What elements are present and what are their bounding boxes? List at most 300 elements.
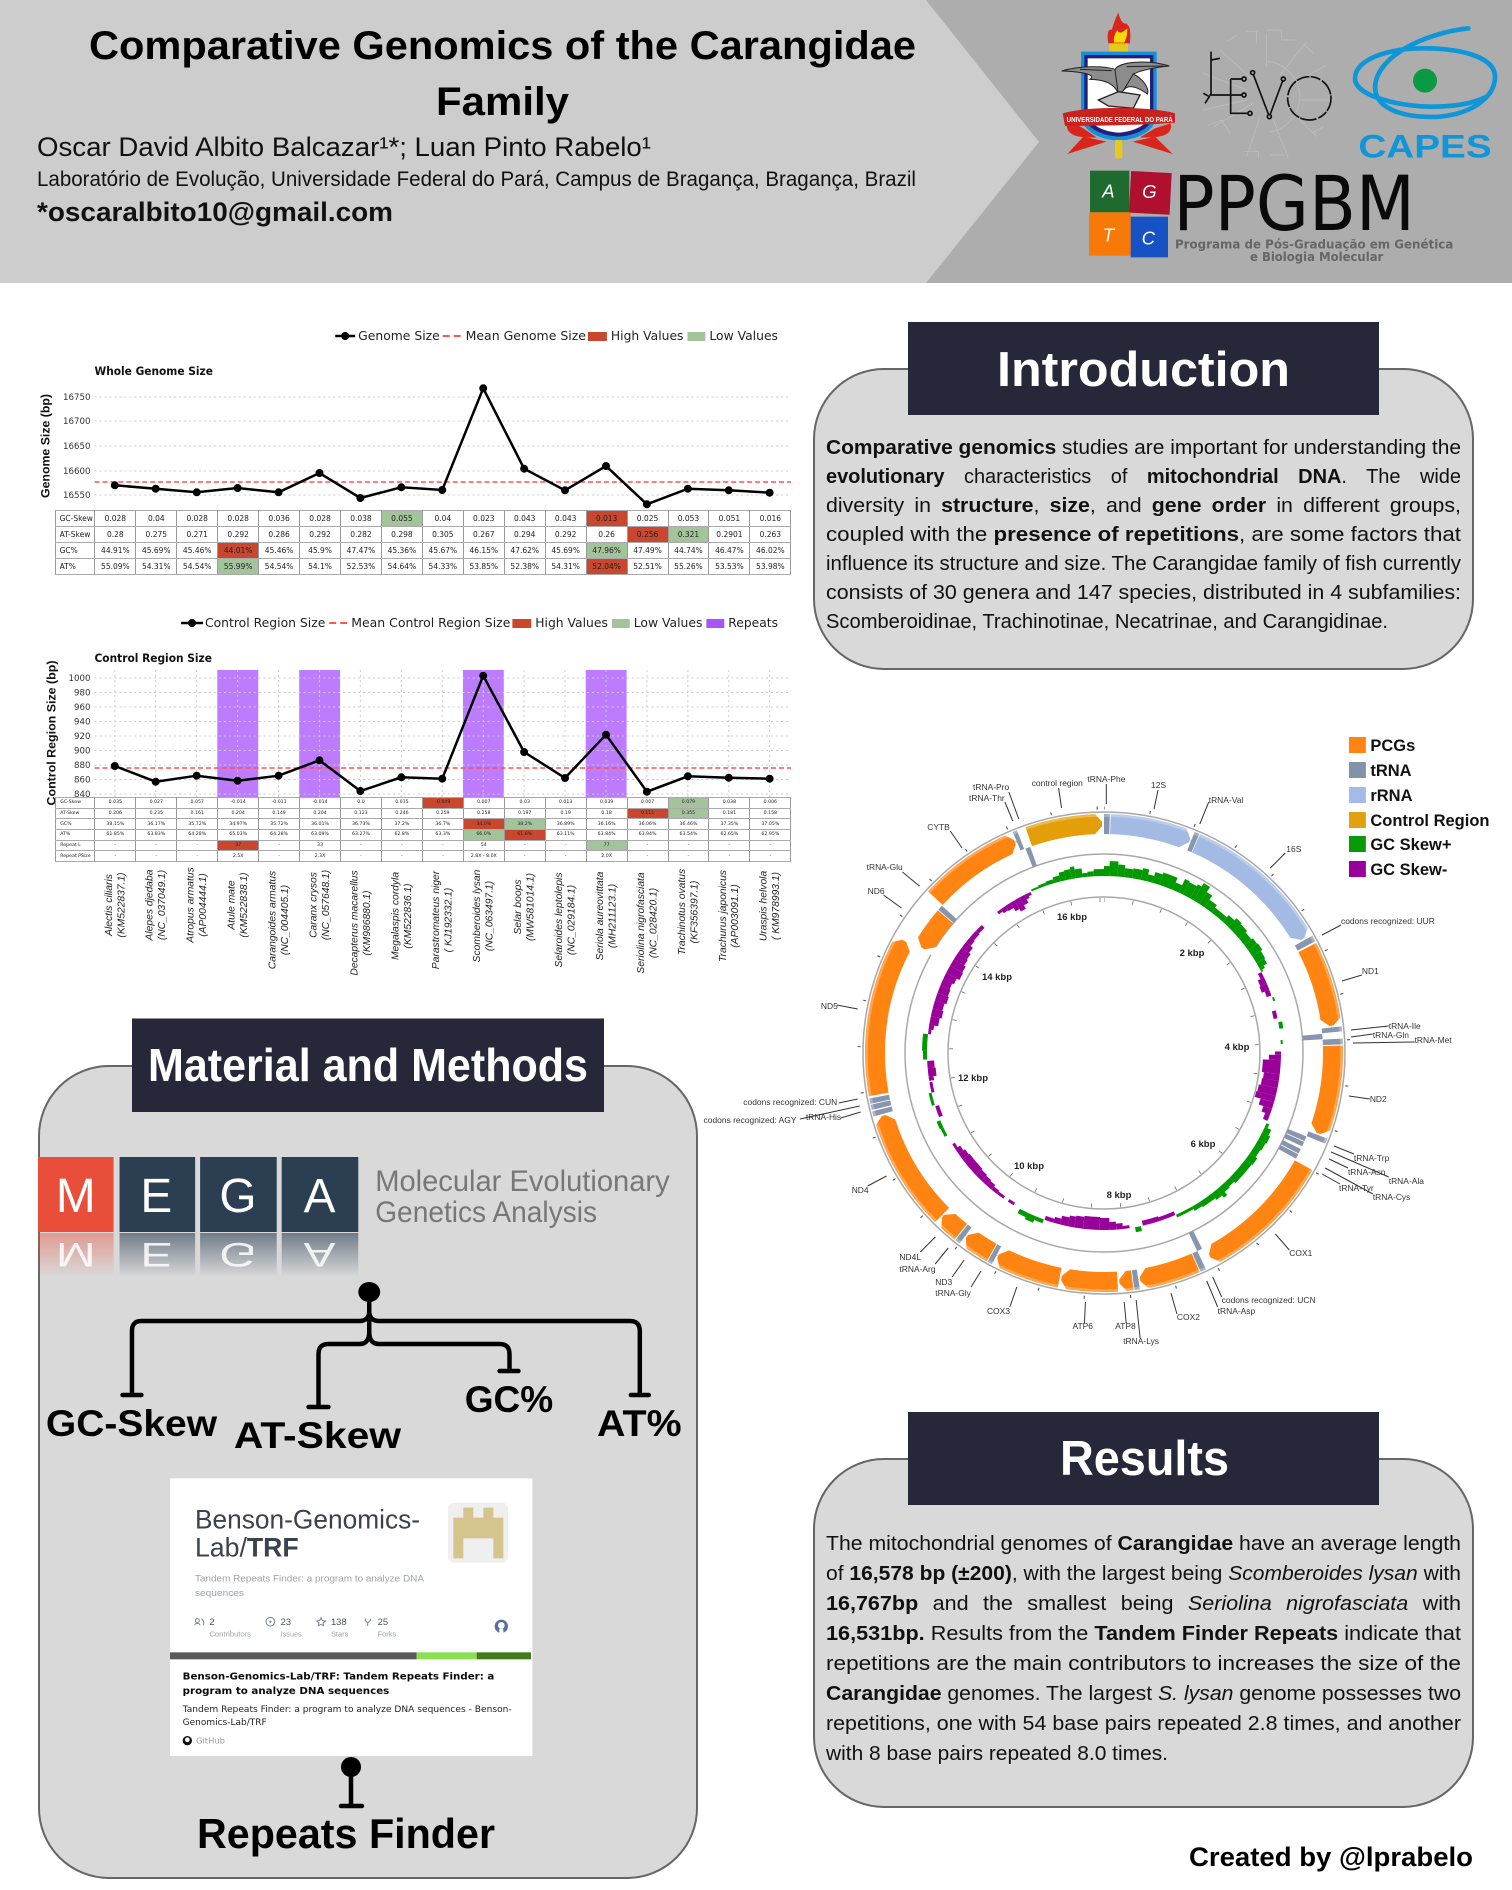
- chart legend: genome size: Low Values: [709, 329, 778, 343]
- mean control region line: [95, 767, 791, 769]
- genome statistics table: 54.54%: [183, 562, 212, 571]
- repeat bars: [217, 670, 627, 797]
- logo: MEGA: M: [56, 1236, 96, 1275]
- control region statistics table: Repeat L: [60, 843, 81, 848]
- control region statistics table: 66.0%: [476, 832, 491, 837]
- chart legend: control region: Control Region Size: [205, 616, 325, 630]
- y axis ticks: control region: 900: [74, 746, 91, 757]
- control region statistics table: -: [196, 854, 198, 859]
- GitHub card: Benson-Genomics-Lab/TRF: Genomics-Lab/TRF: [183, 1718, 267, 1728]
- GitHub card: Benson-Genomics-Lab/TRF: GitHub: [196, 1737, 225, 1746]
- species labels: (MW581014.1): [526, 873, 537, 941]
- control region statistics table: Repeat PSize: [60, 854, 91, 859]
- control region statistics table: -: [565, 854, 566, 859]
- control region statistics table: 62.65%: [720, 832, 738, 837]
- gene ring: control region: [875, 824, 1333, 1282]
- control region statistics table: 0.18: [601, 811, 612, 816]
- gene labels: ND1: [1362, 966, 1379, 976]
- control region statistics table: 77: [604, 843, 610, 848]
- logo: UFPA crest: UNIVERSIDADE FEDERAL DO PARÁ: [1067, 115, 1173, 124]
- genome statistics table: [55, 510, 791, 575]
- control region statistics table: 2.8X - 8.0X: [471, 854, 497, 859]
- logo: PPGBM: Programa de Pós-Graduação em Genética: [1175, 236, 1453, 251]
- gene labels: COX3: [987, 1306, 1010, 1316]
- text block: introduction: Comparative genomics studies are important for understanding the: [826, 437, 1461, 459]
- gene labels: CYTB: [927, 822, 950, 832]
- control region statistics table: 0.123: [354, 811, 368, 816]
- panel: introduction: Introduction: [997, 343, 1290, 397]
- y axis ticks: control region: 880: [74, 761, 91, 771]
- gene labels: tRNA-Trp: [1354, 1153, 1390, 1163]
- genome statistics table: 0.028: [105, 514, 126, 523]
- gene labels: tRNA-Phe: [1087, 774, 1126, 784]
- text block: results: Carangidae genomes. The largest S. lysan genome possesses two: [826, 1682, 1461, 1705]
- y axis ticks: control region: [69, 674, 91, 800]
- control region statistics table: 34.97%: [229, 822, 247, 827]
- kbp scale labels: 2 kbp: [1180, 948, 1205, 959]
- metric label: AT-Skew: AT-Skew: [234, 1415, 401, 1456]
- GitHub card: Benson-Genomics-Lab/TRF: Contributors: [209, 1632, 252, 1639]
- species labels: [104, 867, 782, 976]
- genome statistics table: 0.028: [309, 514, 331, 523]
- genome statistics table: 0.292: [555, 530, 576, 539]
- genome statistics table: 0.286: [268, 530, 290, 539]
- control region statistics table: 0.158: [764, 811, 777, 816]
- gene labels: tRNA-Lys: [1123, 1336, 1159, 1346]
- map legend: rRNA: [1370, 786, 1413, 805]
- chart legend: control region: High Values: [535, 616, 608, 630]
- control region statistics table: 36.73%: [352, 822, 370, 827]
- control region statistics table: 0.0: [357, 800, 365, 805]
- y axis ticks: control region: 980: [74, 688, 91, 699]
- y axis ticks: control region: 940: [74, 717, 91, 728]
- y axis label: genome size: Genome Size (bp): [39, 394, 53, 498]
- GitHub card: Benson-Genomics-Lab/TRF: Benson-Genomics-Lab/TRF: Tandem Repeats Finder: a: [183, 1671, 494, 1682]
- kbp scale labels: 4 kbp: [1225, 1042, 1250, 1053]
- y axis ticks: control region: 840: [74, 790, 91, 800]
- genome statistics table: 45.36%: [388, 546, 416, 555]
- control region statistics table: 54: [481, 843, 487, 848]
- control region statistics table: 0.161: [190, 811, 204, 816]
- control region statistics table: 0.246: [395, 811, 409, 816]
- map legend: [1349, 736, 1490, 879]
- genome size chart: [39, 329, 791, 504]
- logo: MEGA: [38, 1157, 670, 1277]
- gene labels: ATP8: [1115, 1321, 1136, 1331]
- control region statistics table: 37: [235, 843, 241, 848]
- genome statistics table: 0.025: [637, 514, 658, 523]
- genome statistics table: 54.54%: [265, 562, 293, 571]
- text block: introduction: diversity in structure , size, and gene order in different groups,: [826, 495, 1461, 517]
- genome statistics table: 44.74%: [674, 546, 703, 555]
- control region statistics table: 36.01%: [311, 822, 329, 827]
- panel: results: Results: [1060, 1432, 1229, 1486]
- control region statistics table: 0.035: [109, 800, 122, 805]
- genome statistics table: 0.28: [107, 530, 124, 539]
- control region statistics table: 65.03%: [229, 832, 247, 837]
- text block: results: repetitions, one with 54 base pairs repeated 2.8 times, and another: [826, 1712, 1461, 1735]
- control region statistics table: 37.35%: [720, 822, 738, 827]
- species labels: Parastromateus niger: [431, 870, 442, 969]
- connector: repeats finder: [341, 1757, 362, 1806]
- map legend: GC Skew-: [1370, 860, 1447, 879]
- species labels: Uraspis helvola: [759, 871, 770, 941]
- authors: Oscar David Albito Balcazar¹*; Luan Pinto Rabelo¹: [37, 132, 651, 162]
- genome statistics table: 45.69%: [551, 546, 580, 555]
- genome statistics table: 53.53%: [715, 562, 744, 571]
- GitHub card: Benson-Genomics-Lab/TRF: Benson-Genomics-: [195, 1504, 420, 1534]
- control region statistics table: -: [155, 843, 157, 848]
- species labels: Caranx crysos: [308, 872, 319, 938]
- control region statistics table: 37.2%: [394, 822, 409, 827]
- genome statistics table: 0.275: [146, 530, 167, 539]
- logo: MEGA: Genetics Analysis: [375, 1196, 597, 1229]
- control region statistics table: 36.89%: [557, 822, 575, 827]
- control region statistics table: 63.3%: [435, 832, 450, 837]
- genome statistics table: 45.9%: [308, 546, 332, 555]
- GitHub card: Benson-Genomics-Lab/TRF: 23: [281, 1617, 291, 1627]
- species labels: (NC_004405.1): [280, 885, 291, 955]
- panel: results: [814, 1412, 1473, 1807]
- GitHub card: Benson-Genomics-Lab/TRF: sequences: [195, 1588, 245, 1598]
- gene labels: codons recognized: CUN: [743, 1097, 837, 1107]
- species labels: Scomberoides lysan: [472, 869, 483, 962]
- genome statistics table: 0.305: [432, 530, 454, 539]
- genome statistics table: 0.256: [637, 530, 658, 539]
- chart legend: control region: Mean Control Region Size: [351, 616, 510, 630]
- species labels: (AP003091.1): [730, 884, 741, 948]
- gene labels: tRNA-Asn: [1348, 1167, 1386, 1177]
- control region statistics table: -: [647, 843, 648, 848]
- control region statistics table: 0.259: [436, 811, 450, 816]
- gene labels: tRNA-Arg: [899, 1264, 936, 1274]
- genome statistics table: 45.46%: [265, 546, 293, 555]
- control region statistics table: 63.94%: [639, 832, 656, 837]
- genome statistics table: 44.01%: [224, 546, 252, 555]
- map legend: Control Region: [1370, 811, 1490, 830]
- logo: MEGA: G: [219, 1170, 256, 1223]
- control region statistics table: 0.007: [477, 800, 490, 805]
- text block: introduction: coupled with the presence of repetitions , are some factors that: [826, 524, 1461, 546]
- genome statistics table: 0.028: [186, 514, 208, 523]
- gene labels: tRNA-Glu: [867, 862, 903, 872]
- genome statistics table: 52.38%: [510, 562, 539, 571]
- text block: results: [825, 1532, 1461, 1765]
- genome statistics table: 44.91%: [101, 546, 130, 555]
- gene labels: tRNA-Ala: [1389, 1176, 1424, 1186]
- text block: results: of 16,578 bp (±200), with the largest being Scomberoides lysan with: [826, 1562, 1461, 1585]
- gene ring: tRNA: [875, 824, 1333, 1282]
- y axis ticks: control region: 920: [74, 732, 91, 742]
- control region statistics table: -: [278, 854, 280, 859]
- control region statistics table: 0.197: [518, 811, 531, 816]
- control region statistics table: 0.013: [559, 800, 572, 805]
- gene labels: 12S: [1151, 780, 1166, 790]
- GitHub card: Benson-Genomics-Lab/TRF: Tandem Repeats Finder: a program to analyze DNA: [195, 1574, 424, 1584]
- circular mitogenome map: [704, 774, 1452, 1346]
- kbp scale labels: 10 kbp: [1014, 1161, 1044, 1172]
- chart legend: control region: [181, 616, 778, 630]
- species labels: (NC_029184.1): [566, 885, 577, 955]
- gene labels: tRNA-Val: [1209, 795, 1243, 805]
- control region statistics table: -: [769, 854, 771, 859]
- control region statistics table: [55, 797, 791, 862]
- species labels: (MH211123.1): [607, 884, 618, 948]
- control region statistics table: 0.03: [520, 800, 530, 805]
- species labels: ( KJ192332.1): [444, 888, 455, 952]
- GitHub card: Benson-Genomics-Lab/TRF: 2: [209, 1617, 215, 1627]
- logo: MEGA: Molecular Evolutionary: [375, 1165, 670, 1198]
- kbp scale labels: 16 kbp: [1057, 912, 1087, 923]
- map legend: tRNA: [1370, 761, 1412, 780]
- genome statistics table: 45.69%: [142, 546, 171, 555]
- control region statistics table: 64.28%: [270, 832, 288, 837]
- control region statistics table: 36.06%: [639, 822, 656, 827]
- y axis ticks: genome size: 16600: [63, 467, 91, 477]
- control region statistics table: 38.15%: [106, 822, 124, 827]
- chart legend: genome size: Mean Genome Size: [466, 329, 586, 343]
- control region statistics table: 0.204: [313, 811, 327, 816]
- genome statistics table: 55.09%: [101, 562, 130, 571]
- control region statistics table: 36.46%: [680, 822, 697, 827]
- kbp scale labels: [958, 912, 1250, 1201]
- control region statistics table: 37.05%: [761, 822, 779, 827]
- genome statistics table: 0.055: [391, 514, 413, 523]
- gene labels: ND3: [935, 1277, 952, 1287]
- text block: results: The mitochondrial genomes of Carangidae have an average length: [826, 1532, 1461, 1555]
- GitHub card: Benson-Genomics-Lab/TRF: 138: [331, 1617, 347, 1627]
- control region statistics table: 0.355: [682, 811, 695, 816]
- y axis ticks: genome size: [63, 393, 91, 501]
- control region statistics table: -: [769, 843, 771, 848]
- control region statistics table: -: [565, 843, 566, 848]
- text block: introduction: influence its structure and size. The Carangidae family of fish currently: [826, 553, 1461, 575]
- control region statistics table: -0.014: [312, 800, 328, 805]
- scale ticks: [859, 808, 1349, 1298]
- gene labels: tRNA-Tyr: [1339, 1183, 1374, 1193]
- control region statistics table: -: [114, 843, 116, 848]
- title: Family: [436, 80, 570, 124]
- text block: introduction: consists of 30 genera and 147 species, distributed in 4 subfamilies:: [826, 582, 1461, 604]
- genome statistics table: 0.023: [473, 514, 495, 523]
- control region statistics table: -: [442, 854, 444, 859]
- gene labels: tRNA-Asp: [1218, 1306, 1256, 1316]
- GC skew positive: [917, 866, 1291, 1240]
- species labels: (NC_028420.1): [648, 888, 659, 958]
- genome statistics table: 55.99%: [224, 562, 252, 571]
- chart legend: control region: Repeats: [728, 616, 778, 630]
- control region statistics table: 34.0%: [476, 822, 491, 827]
- label: repeats finder: Repeats Finder: [197, 1810, 495, 1857]
- genome statistics table: 45.46%: [183, 546, 212, 555]
- control region statistics table: 63.27%: [352, 832, 370, 837]
- panel: material and methods: Material and Methods: [148, 1039, 588, 1091]
- control region statistics table: GC%: [60, 822, 72, 827]
- genome statistics table: AT-Skew: [60, 530, 90, 539]
- gene labels: tRNA-Thr: [969, 793, 1005, 803]
- control region statistics table: 63.83%: [147, 832, 165, 837]
- y axis label: control region: Control Region Size (bp): [45, 660, 59, 806]
- control region size chart: [45, 616, 791, 806]
- species labels: Decapterus macarellus: [349, 870, 360, 976]
- kbp scale labels: 6 kbp: [1191, 1139, 1216, 1150]
- gene leader lines: [800, 784, 1415, 1338]
- GitHub card: Benson-Genomics-Lab/TRF: program to analyze DNA sequences: [183, 1686, 390, 1697]
- text block: introduction: Scomberoidinae, Trachinotinae, Necatrinae, and Carangidinae.: [826, 611, 1388, 633]
- control region statistics table: 36.17%: [147, 822, 165, 827]
- control region statistics table: -: [524, 843, 526, 848]
- genome statistics table: 0.053: [678, 514, 699, 523]
- control region statistics table: 0.057: [190, 800, 204, 805]
- gene labels: ND5: [821, 1001, 838, 1011]
- header band: [0, 0, 1512, 283]
- genome statistics table: 52.51%: [633, 562, 662, 571]
- kbp scale labels: 14 kbp: [982, 972, 1012, 983]
- control region statistics table: 0.039: [600, 800, 613, 805]
- gene labels: tRNA-Ile: [1389, 1021, 1421, 1031]
- gene labels: tRNA-Gln: [1373, 1030, 1409, 1040]
- control region statistics table: 63.84%: [598, 832, 616, 837]
- control region series: [115, 676, 770, 792]
- genome statistics table: GC%: [60, 546, 78, 555]
- gene labels: codons recognized: UCN: [1222, 1295, 1316, 1305]
- control region statistics table: 0.149: [272, 811, 286, 816]
- diagram: MEGA metric tree: [46, 1282, 682, 1456]
- metric label: GC%: GC%: [465, 1379, 553, 1420]
- title: [89, 24, 916, 124]
- control region statistics table: 61.8%: [517, 832, 532, 837]
- genome statistics table: 0.26: [598, 530, 615, 539]
- control region statistics table: 38.2%: [517, 822, 532, 827]
- gene labels: [704, 774, 1452, 1346]
- y axis ticks: control region: 960: [74, 703, 91, 713]
- GitHub card: Benson-Genomics-Lab/TRF: Lab/TRF: [195, 1533, 299, 1563]
- control region statistics table: -: [688, 843, 689, 848]
- logo: PPGBM: C: [1142, 227, 1156, 248]
- gene labels: tRNA-Gly: [935, 1288, 972, 1298]
- control region statistics table: -: [647, 854, 648, 859]
- species labels: (KM522837.1): [116, 872, 127, 938]
- control region statistics table: 0.204: [231, 811, 245, 816]
- control region statistics table: 33: [317, 843, 323, 848]
- control region statistics table: 61.85%: [106, 832, 124, 837]
- species labels: (KM522838.1): [239, 872, 250, 938]
- genome statistics table: 0.282: [350, 530, 372, 539]
- genome statistics table: 54.31%: [142, 562, 171, 571]
- GitHub card: Benson-Genomics-Lab/TRF: 25: [378, 1617, 388, 1627]
- genome statistics table: 0.298: [391, 530, 413, 539]
- panel: material and methods: [39, 1018, 697, 1878]
- species labels: (KF356397.1): [689, 881, 700, 943]
- logo: PPGBM: [1089, 160, 1453, 264]
- map rings: [863, 812, 1345, 1294]
- control region statistics table: AT-Skew: [60, 811, 79, 816]
- genome statistics table: 46.15%: [469, 546, 498, 555]
- control region statistics table: 64.28%: [188, 832, 206, 837]
- gene labels: ND6: [868, 886, 885, 896]
- genome statistics table: 0.04: [148, 514, 165, 523]
- control region statistics table: -: [729, 843, 730, 848]
- control region statistics table: 2.3X: [315, 854, 325, 859]
- genome statistics table: 0.321: [678, 530, 699, 539]
- logo: MEGA: G: [219, 1236, 256, 1275]
- panel: introduction: [814, 322, 1473, 669]
- genome statistics table: 0.043: [555, 514, 576, 523]
- species labels: Atropus armatus: [186, 867, 197, 944]
- species labels: Selaroides leptolepis: [554, 873, 565, 967]
- y axis ticks: genome size: 16550: [63, 491, 91, 501]
- control region statistics table: 2.0X: [601, 854, 612, 859]
- species labels: (NC_063497.1): [485, 881, 496, 951]
- control region statistics table: 0.027: [150, 800, 163, 805]
- logo: MEGA: M: [56, 1170, 96, 1223]
- chart legend: genome size: High Values: [611, 329, 683, 343]
- control region statistics table: -: [360, 854, 362, 859]
- mean genome size line: [95, 481, 791, 483]
- logo: MEGA: A: [304, 1236, 336, 1275]
- control region statistics table: AT%: [60, 832, 70, 837]
- control region statistics table: 0.079: [682, 800, 695, 805]
- genome statistics table: 0.04: [434, 514, 451, 523]
- species labels: Trachinotus ovatus: [677, 869, 688, 955]
- logo: UFPA crest: [1062, 13, 1175, 158]
- control region statistics table: -: [401, 843, 403, 848]
- kbp scale labels: 8 kbp: [1107, 1190, 1132, 1201]
- logo: PPGBM: T: [1103, 224, 1116, 245]
- y axis ticks: genome size: 16750: [63, 393, 91, 403]
- control region statistics table: 0.038: [723, 800, 736, 805]
- gene labels: codons recognized: UUR: [1341, 916, 1435, 926]
- text block: introduction: [826, 437, 1461, 633]
- control region statistics table: -0.049: [435, 800, 450, 805]
- genome size series: [115, 388, 770, 504]
- control region statistics table: 0.235: [150, 811, 163, 816]
- species labels: Alectis ciliaris: [104, 874, 115, 937]
- control region statistics table: 63.11%: [557, 832, 575, 837]
- genome statistics table: 0.292: [309, 530, 331, 539]
- genome statistics table: 0.294: [514, 530, 535, 539]
- control region statistics table: 0.006: [764, 800, 777, 805]
- control region statistics table: 2.5X: [233, 854, 243, 859]
- GitHub card: Benson-Genomics-Lab/TRF: Tandem Repeats Finder: a program to analyze DNA sequences - Benson-: [182, 1705, 512, 1715]
- genome statistics table: 47.96%: [592, 546, 621, 555]
- gene labels: tRNA-Pro: [973, 782, 1009, 792]
- gene labels: COX2: [1177, 1312, 1200, 1322]
- genome statistics table: 0.028: [227, 514, 249, 523]
- control region statistics table: 0.206: [109, 811, 122, 816]
- species labels: ( KM978993.1): [771, 872, 782, 940]
- species labels: (AP004444.1): [198, 873, 209, 937]
- species labels: Seriolina nigrofasciata: [636, 872, 647, 974]
- logo: PPGBM: e Biologia Molecular: [1250, 249, 1384, 264]
- gene ring: rRNA: [875, 824, 1333, 1282]
- genome statistics table: 45.67%: [429, 546, 457, 555]
- control region statistics table: 0.007: [641, 800, 654, 805]
- logo: LEVO: [1203, 30, 1333, 158]
- species labels: Carangoides armatus: [268, 871, 279, 969]
- y axis ticks: control region: 1000: [69, 674, 91, 684]
- GC skew negative: [928, 878, 1280, 1228]
- chart heading: control region size: Control Region Size: [95, 652, 212, 665]
- gene arrow tips: [873, 813, 1342, 1293]
- control region statistics table: -0.014: [231, 800, 246, 805]
- control region statistics table: -: [196, 843, 198, 848]
- control region statistics table: -: [524, 854, 526, 859]
- control region statistics table: -: [729, 854, 730, 859]
- species labels: Seriola aureovittata: [595, 871, 606, 960]
- logo: PPGBM: PPGBM: [1173, 160, 1415, 248]
- genome statistics table: 53.98%: [756, 562, 785, 571]
